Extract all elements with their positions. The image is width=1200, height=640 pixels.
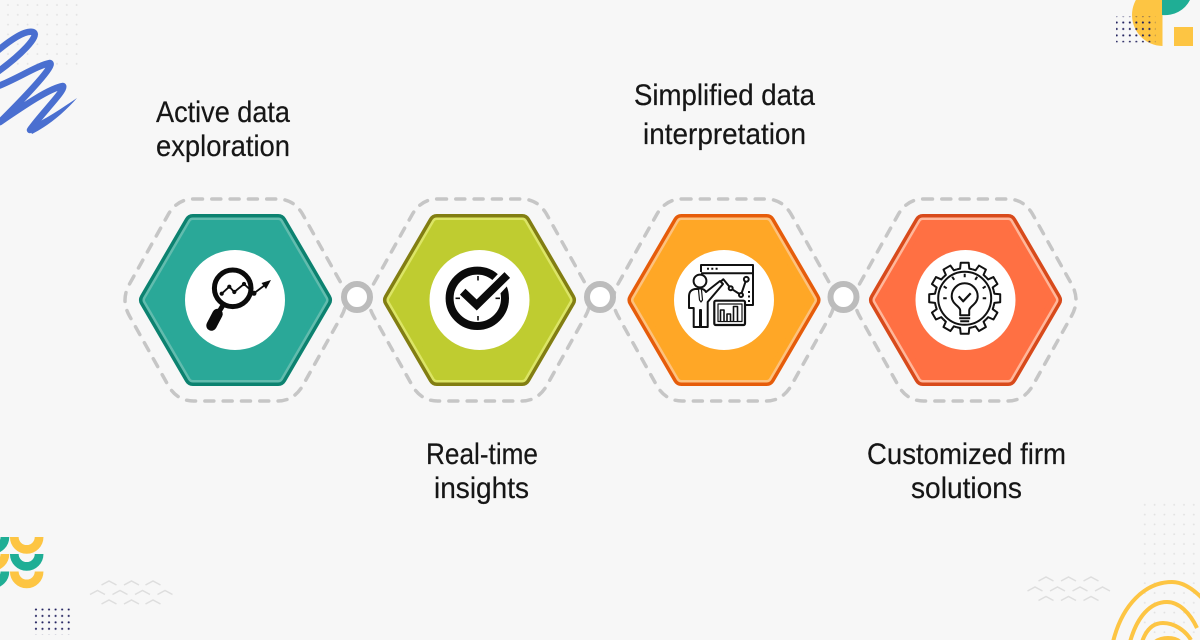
dashed outline: step 3 (614, 199, 834, 401)
heading: Real-time insights (426, 438, 538, 505)
decoration: top-right shapes (1116, 0, 1193, 46)
icon: magnifier with trend line (185, 250, 285, 350)
heading: Real-time insights: Real-time (426, 438, 538, 471)
heading: Active data exploration: Active data (156, 96, 290, 129)
icon: clock with check mark (430, 250, 530, 350)
decoration: bottom-left half rings, dots, chevrons (0, 537, 172, 634)
heading: Simplified data interpretation: interpretation (643, 118, 806, 151)
heading: Simplified data interpretation (634, 79, 815, 151)
icon: presenter with charts (674, 250, 774, 350)
heading: Customized firm solutions: solutions (911, 472, 1022, 505)
hexagon: step 3 orange (636, 223, 812, 377)
connector ring 2 (587, 284, 613, 310)
heading: Customized firm solutions: Customized firm (867, 438, 1066, 471)
heading: Real-time insights: insights (434, 472, 529, 505)
dashed outline: step 2 (369, 199, 590, 401)
connector ring 3 (830, 284, 856, 310)
connector ring 1 (344, 284, 370, 310)
hexagon: step 2 lime (392, 223, 567, 377)
dashed outline: step 4 (855, 199, 1076, 401)
dashed outline: step 1 (125, 199, 346, 401)
decoration: bottom-right dots, chevrons, yellow arcs (1028, 497, 1200, 640)
heading: Simplified data interpretation: Simplified data (634, 79, 815, 112)
heading: Active data exploration: exploration (156, 130, 290, 163)
hexagon: step 4 coral (878, 223, 1053, 377)
heading: Customized firm solutions (867, 438, 1066, 505)
decoration: top-left dots and blue squiggle (0, 0, 81, 134)
heading: Active data exploration (156, 96, 290, 163)
hexagon: step 1 teal (148, 223, 323, 377)
icon: gear with light bulb (916, 250, 1016, 350)
